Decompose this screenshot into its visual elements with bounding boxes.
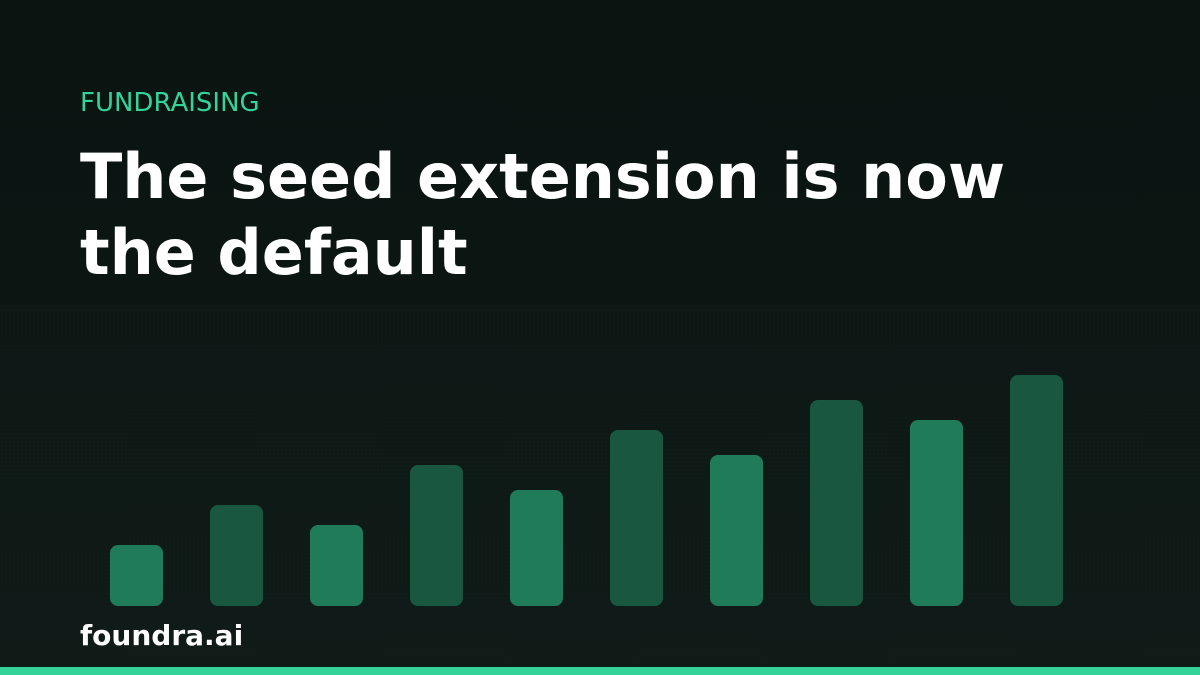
bar 9 [910, 420, 963, 606]
bar 3 [310, 525, 363, 606]
brand name: foundra.ai [80, 619, 243, 652]
bar 2 [210, 505, 263, 606]
bar 5 [510, 490, 563, 606]
accent strip [0, 667, 1200, 675]
bar chart [110, 375, 1063, 606]
bar 7 [710, 455, 763, 606]
bar 1 [110, 545, 163, 606]
title: The seed extension is now [80, 140, 1005, 213]
bar 4 [410, 465, 463, 606]
bar 6 [610, 430, 663, 606]
eyebrow label: FUNDRAISING [80, 88, 260, 118]
title: the default [80, 216, 468, 289]
bar 8 [810, 400, 863, 606]
title [80, 140, 1005, 289]
bar 10 [1010, 375, 1063, 606]
